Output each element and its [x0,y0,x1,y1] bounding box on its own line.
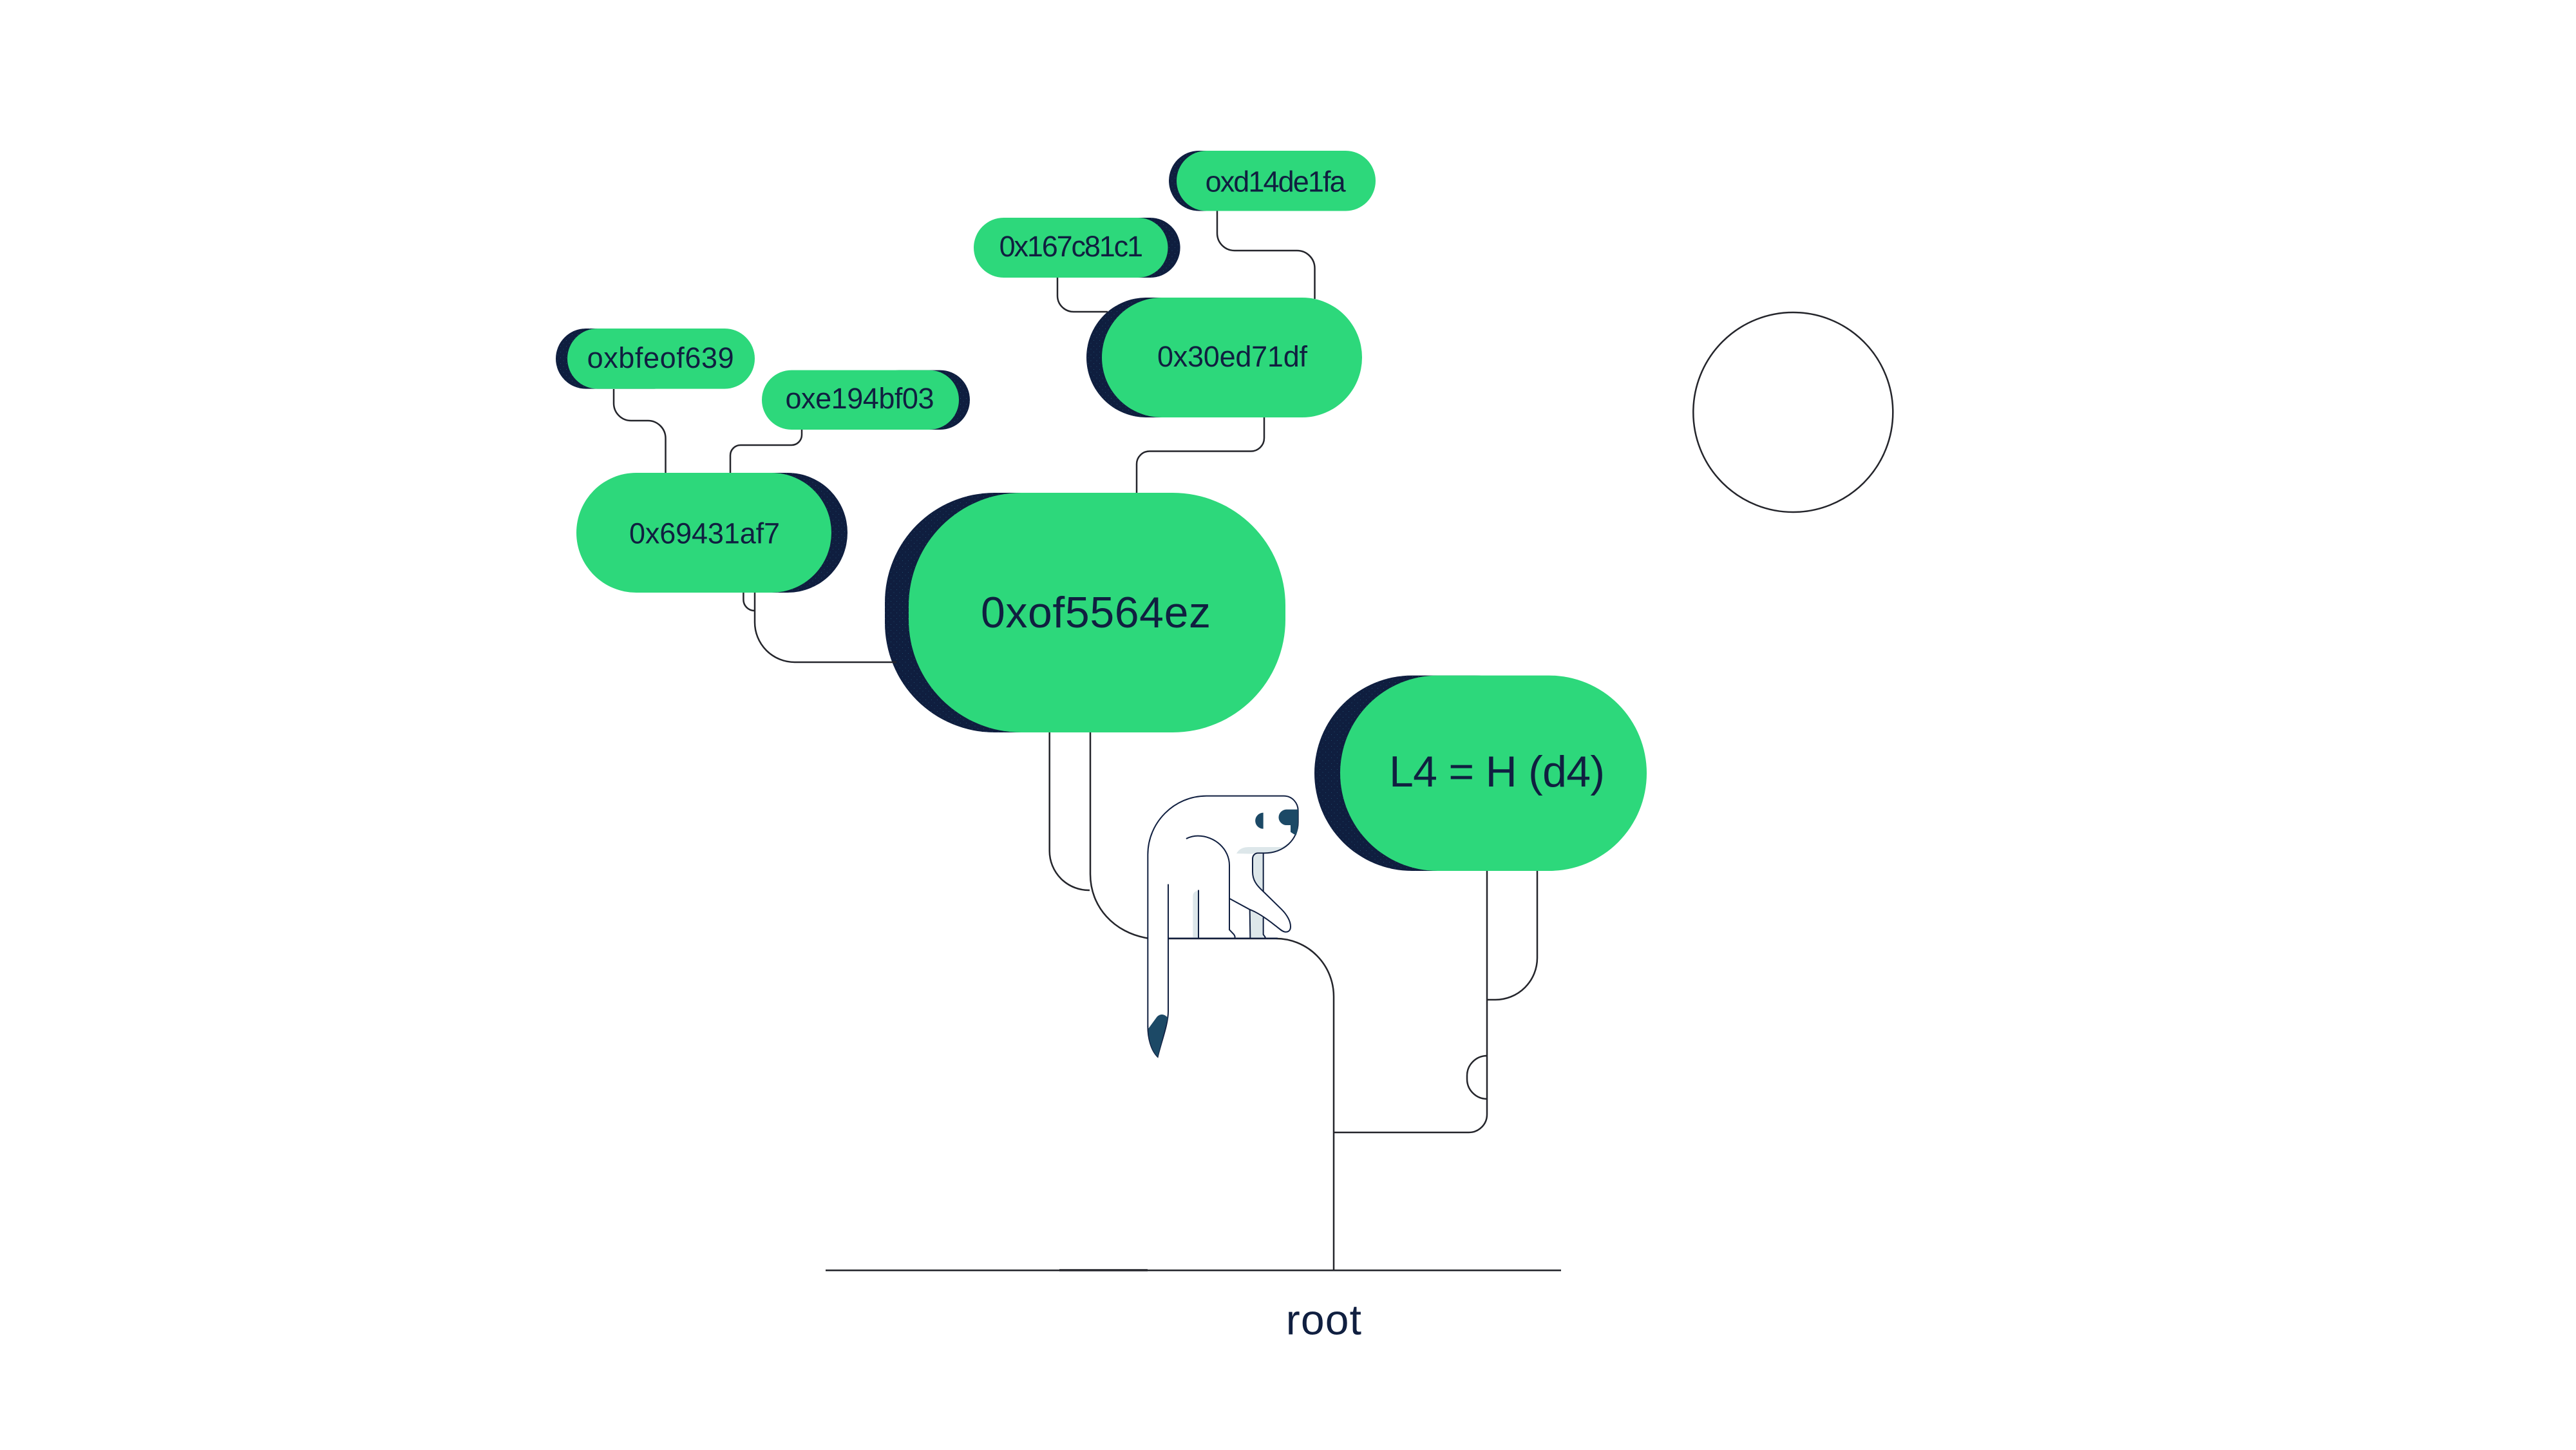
empty circle (sun) [1693,312,1893,512]
dark pill shadows behind the nodes [556,151,1572,871]
node: 0x30ed71df [1102,298,1362,417]
node: 0x30ed71df: 0x30ed71df [1157,340,1307,373]
dog tail tip [1148,1015,1168,1057]
dog nose [1278,810,1298,835]
node: 0xe194bf03 [762,370,959,430]
node: 0x69431af7 [576,473,831,593]
node: L4 = H (d4) [1340,676,1647,871]
node: 0xd14de1fa [1177,151,1376,211]
label: root: root [1286,1296,1361,1344]
node: 0x69431af7: 0x69431af7 [629,517,780,549]
ground line [826,1269,1561,1272]
connector lines between nodes [614,211,1537,1270]
node: 0x167c81c1 [974,218,1168,278]
node: 0xbfeof639: oxbfeof639 [587,341,734,374]
dog shading [1193,842,1289,938]
node: 0xof5564ez: 0xof5564ez [981,588,1211,637]
node: 0xd14de1fa: oxd14de1fa [1206,166,1347,198]
node: L4 = H (d4): L4 = H (d4) [1389,747,1605,796]
dog eye [1255,813,1264,829]
icon: dog sitting on the branch [1148,796,1298,1057]
dog outline [1148,796,1298,1057]
node: 0xbfeof639 [567,329,755,389]
node: 0x167c81c1: 0x167c81c1 [999,230,1143,263]
node: 0xof5564ez [909,493,1285,732]
node: 0xe194bf03: oxe194bf03 [786,382,934,415]
